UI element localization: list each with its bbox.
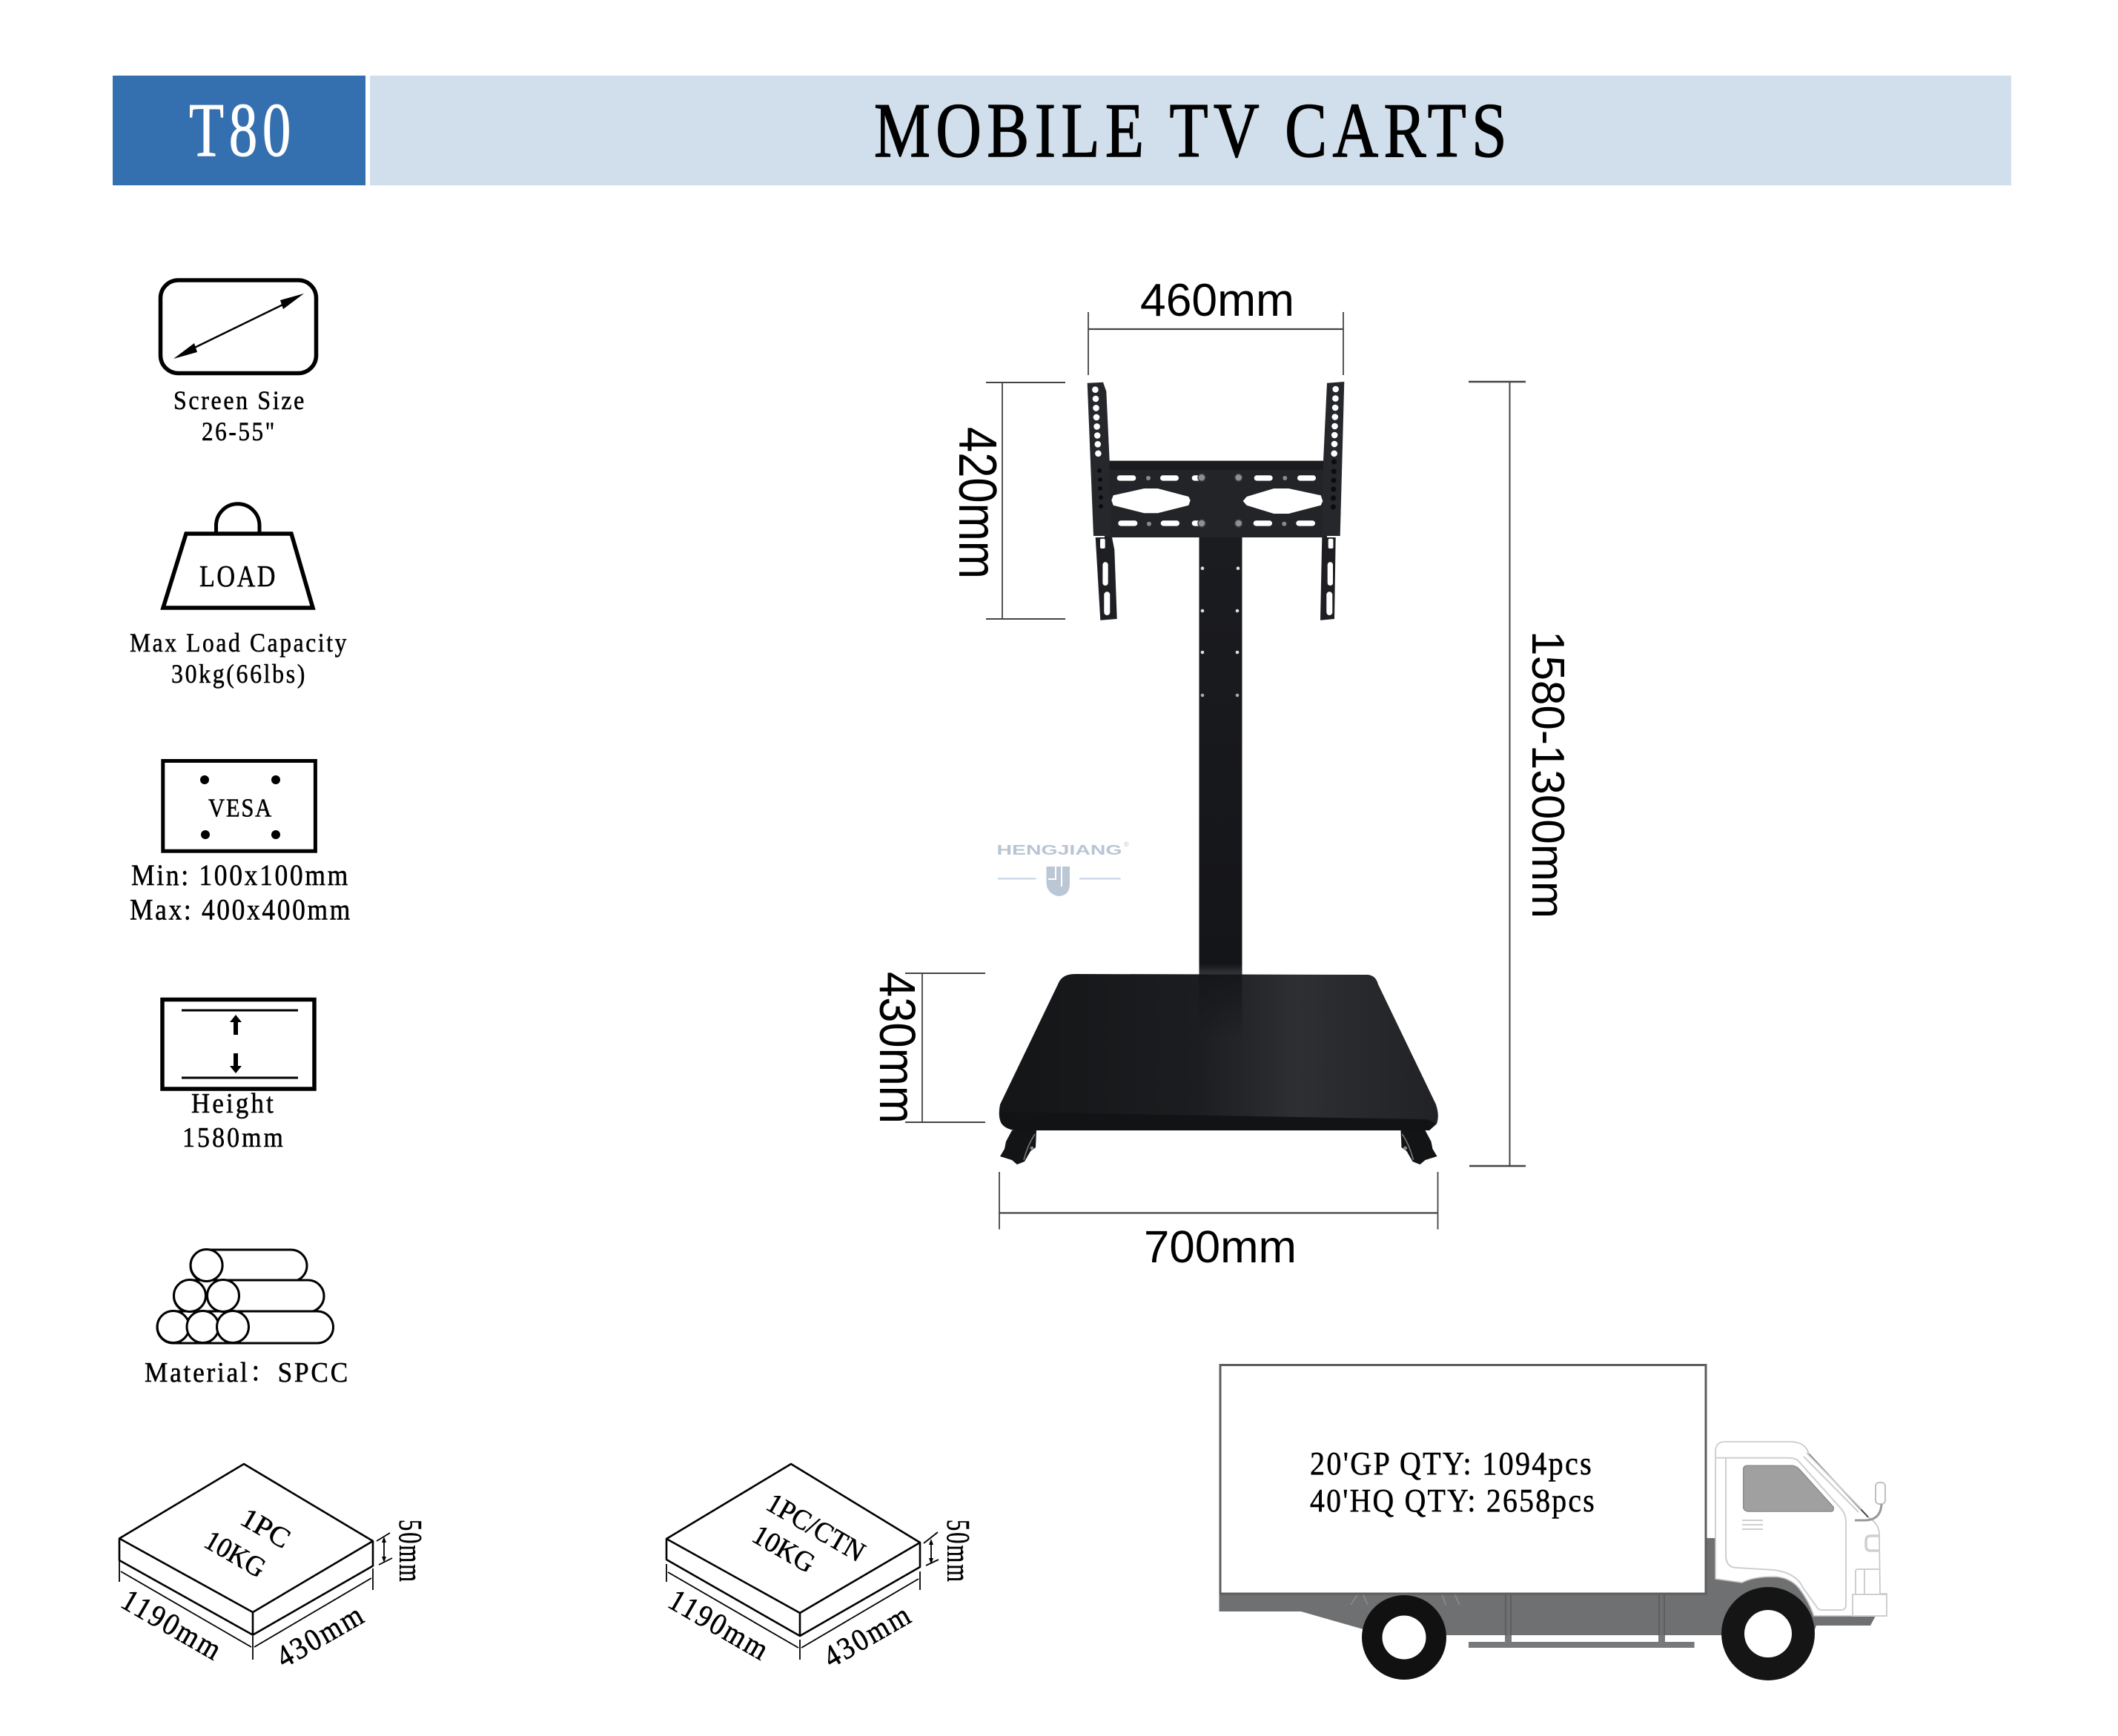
label: height: Height — [191, 1088, 276, 1119]
caster right — [1401, 1130, 1437, 1164]
VESA max: Max: 400x400mm — [130, 892, 352, 927]
label: 420mm: 420mm — [947, 427, 1007, 579]
carton thickness: 50mm — [940, 1520, 976, 1583]
rear axle mounts — [1351, 1594, 1460, 1605]
side step — [1469, 1635, 1695, 1648]
package: 1PC — [116, 1464, 428, 1675]
lower right rail — [1320, 537, 1336, 620]
truck — [1219, 1365, 1887, 1680]
lower left rail — [1096, 537, 1117, 620]
plate top flange — [1109, 461, 1323, 470]
dark rail holes — [1097, 460, 1337, 510]
plate rivets — [1146, 476, 1287, 526]
logo mark — [1047, 867, 1070, 896]
icon: VESA pattern — [163, 761, 315, 851]
plate slots — [1111, 475, 1323, 526]
caster left — [1000, 1130, 1036, 1164]
label: 430mm: 430mm — [869, 972, 926, 1124]
length: 1190mm — [116, 1583, 228, 1668]
icon text: load: LOAD — [199, 559, 277, 593]
label: max load capacity: Max Load Capacity — [130, 628, 348, 657]
icon text: VESA: VESA — [208, 793, 273, 823]
lower rail slots — [1100, 539, 1333, 615]
carton length: 1190mm — [663, 1583, 775, 1668]
box text: 1PC — [235, 1502, 296, 1555]
chassis front skirt — [1813, 1616, 1876, 1626]
windscreen edge — [1809, 1454, 1868, 1517]
icon: weight — [163, 504, 313, 608]
title: MOBILE TV CARTS — [874, 87, 1512, 173]
left rail — [1088, 382, 1111, 536]
mirror — [1855, 1482, 1885, 1520]
label: screen size: Screen Size — [173, 385, 306, 415]
spec: height — [162, 999, 314, 1153]
VESA bracket — [1088, 382, 1344, 620]
spec: screen size — [160, 280, 316, 446]
strut lines — [1505, 1594, 1665, 1635]
box outline — [119, 1464, 373, 1635]
carton text: 1PC/CTN — [761, 1487, 870, 1568]
label: material: Material：SPCC — [145, 1357, 350, 1388]
box weight: 10KG — [199, 1525, 271, 1584]
cab — [1715, 1442, 1887, 1616]
base front lip — [1001, 1112, 1437, 1130]
TV cart product — [999, 382, 1438, 1164]
logo registered mark: ® — [1124, 841, 1129, 848]
chassis — [1219, 1538, 1816, 1635]
rear wheel — [1362, 1595, 1446, 1680]
carton weight: 10KG — [747, 1519, 820, 1580]
cab window — [1744, 1465, 1833, 1511]
base platform — [999, 974, 1438, 1130]
watermark logo — [996, 841, 1129, 896]
carton width: 430mm — [818, 1597, 919, 1675]
label: 700mm: 700mm — [1144, 1222, 1297, 1272]
container qty: 20GP: 20'GP QTY: 1094pcs — [1310, 1445, 1593, 1482]
logo wordmark: HENGJIANG — [996, 843, 1122, 858]
rail holes — [1092, 386, 1339, 457]
cab door lines — [1716, 1453, 1887, 1616]
spec: VESA — [130, 761, 352, 927]
label: 1580-1300mm: 1580-1300mm — [1522, 631, 1573, 918]
dimension lines — [119, 1533, 392, 1660]
header: model badge — [113, 76, 365, 185]
value: screen size: 26-55" — [202, 417, 277, 446]
front wheel — [1721, 1587, 1815, 1680]
container qty: 40HQ: 40'HQ QTY: 2658pcs — [1310, 1482, 1596, 1519]
spec: material — [145, 1250, 350, 1388]
screws — [1198, 474, 1242, 527]
header: title bar — [370, 76, 2011, 185]
right rail — [1322, 382, 1344, 536]
VESA min: Min: 100x100mm — [131, 858, 350, 892]
cargo box — [1220, 1365, 1706, 1594]
package: 1PC/CTN — [663, 1464, 976, 1675]
mounting plate — [1105, 461, 1327, 537]
icon: height — [162, 999, 314, 1089]
icon: steel tubes — [157, 1250, 334, 1343]
width: 430mm — [271, 1597, 371, 1675]
icon: screen diagonal — [160, 280, 316, 374]
model number: T80 — [189, 87, 296, 173]
thickness: 50mm — [392, 1520, 428, 1583]
value: height: 1580mm — [182, 1122, 285, 1153]
spec: max load — [130, 504, 348, 689]
label: 460mm: 460mm — [1140, 275, 1294, 326]
value: max load: 30kg(66lbs) — [171, 659, 307, 689]
carton dimension lines — [666, 1532, 939, 1660]
pole — [1199, 537, 1242, 1039]
carton outline — [666, 1464, 920, 1636]
